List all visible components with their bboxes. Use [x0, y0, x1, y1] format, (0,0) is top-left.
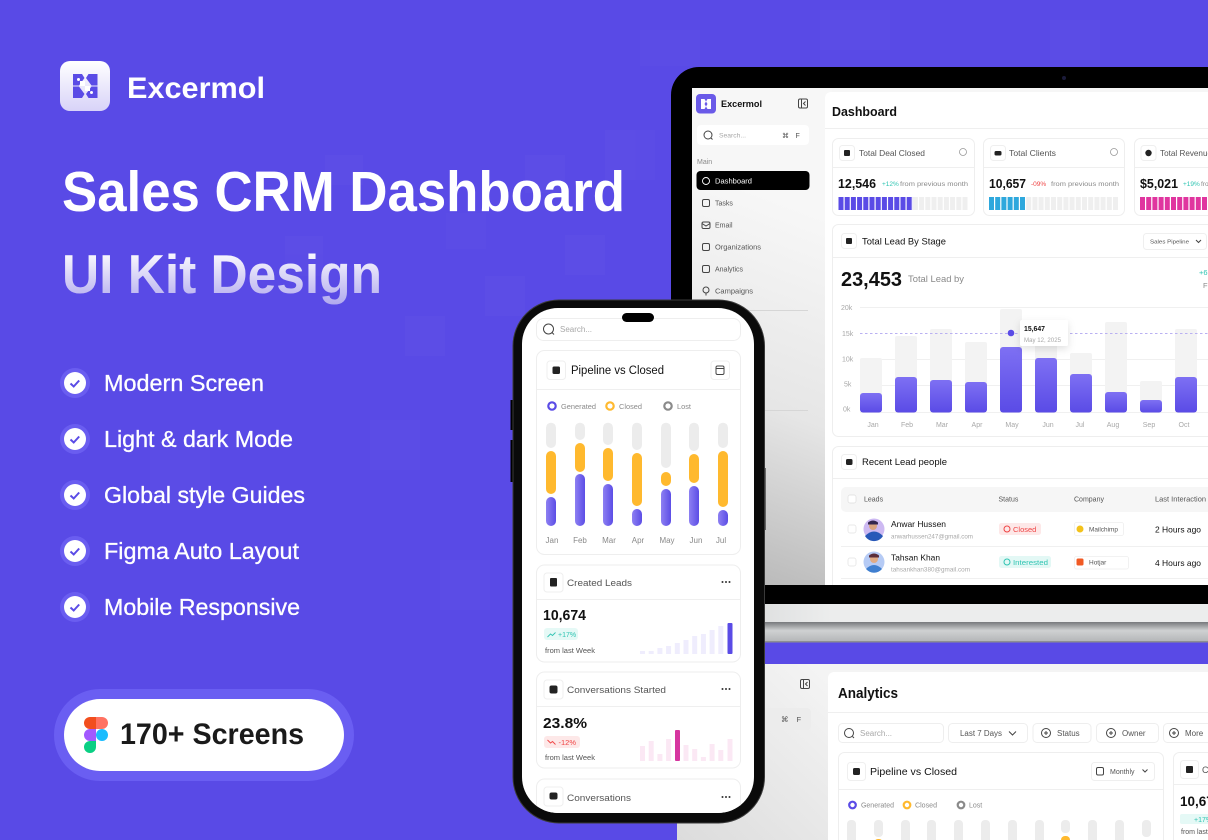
- calendar button: [711, 361, 730, 380]
- filter: more: More: [1185, 729, 1204, 738]
- chart card: total lead by stage: Total Lead By Stage: [862, 236, 946, 248]
- chart card: total lead by stage: F: [1203, 281, 1208, 290]
- bar chart: Apr: [972, 422, 983, 429]
- laptop bezel: [671, 67, 1208, 604]
- mini bar chart: [640, 730, 732, 761]
- bar chart: Oct: [1179, 422, 1189, 429]
- legend: Generated: [561, 402, 596, 411]
- bar chart: 10k: [842, 356, 854, 364]
- phone card: created leads: 10,674: [543, 607, 587, 624]
- stat card: total revenue: $5,021: [1140, 176, 1178, 191]
- nav: tasks: [702, 200, 733, 208]
- filter: last 7 days: Last 7 Days: [960, 729, 1002, 738]
- nav: analytics: Analytics: [715, 266, 744, 274]
- phone card: pipeline vs closed: [536, 350, 740, 554]
- table row: anwar hussen: Anwar Hussen: [891, 519, 946, 529]
- feature: light and dark mode: [60, 424, 293, 454]
- table row: anwar hussen: Mailchimp: [1089, 526, 1118, 534]
- stacked bar chart: Apr: [632, 536, 645, 545]
- stat card: total clients: Total Clients: [1009, 148, 1056, 158]
- nav: campaigns: [703, 287, 754, 296]
- badge label: 170+ Screens: [120, 718, 304, 751]
- chart card: total lead by stage: Total Lead by: [908, 274, 964, 285]
- stat card: total deal closed: Total Deal Closed: [859, 148, 925, 158]
- nav: email: Email: [715, 222, 733, 230]
- logo wordmark: Excermol: [127, 72, 265, 105]
- laptop screen: [692, 88, 1208, 585]
- phone card: conversations started: [536, 672, 740, 768]
- phone card: created leads: [536, 565, 740, 662]
- analytics sidebar search: [700, 708, 811, 730]
- analytics sidebar search: ⌘: [781, 715, 789, 724]
- table row: tahsan khan: Tahsan Khan: [891, 552, 940, 562]
- analytics screen mockup: [677, 664, 1208, 840]
- stat card: total clients: 10,657: [989, 176, 1026, 191]
- stacked bar chart: Jun: [690, 536, 702, 545]
- legend: [548, 402, 692, 411]
- analytics created leads card: from last: [1181, 829, 1208, 836]
- table row: tahsan khan: [848, 552, 1201, 574]
- trend pill: [544, 736, 580, 748]
- bar chart: May: [1005, 422, 1019, 429]
- feature: modern screen: [60, 368, 264, 398]
- sidebar search: [704, 130, 800, 140]
- feature: mobile responsive: Mobile Responsive: [104, 594, 300, 620]
- stacked bar chart: Jan: [546, 536, 558, 545]
- feature list: [60, 368, 305, 622]
- table row: anwar hussen: [848, 518, 1201, 541]
- sidebar search: ⌘: [782, 132, 789, 140]
- phone search: Search...: [560, 325, 592, 334]
- trend pill: +17%: [558, 632, 576, 639]
- phone screen: [522, 308, 754, 839]
- phone card: conversations: [536, 778, 741, 813]
- stacked bars preview: [847, 820, 1151, 840]
- bar chart: 20k: [841, 305, 853, 312]
- more menu: [722, 688, 730, 690]
- sidebar logo: [696, 94, 762, 114]
- phone side buttons: [510, 400, 766, 530]
- monthly dropdown: [1092, 762, 1154, 780]
- analytics collapse icon: [800, 680, 810, 688]
- table header: [841, 487, 1208, 512]
- background texture squares: [150, 10, 1100, 610]
- stat card: total deal closed: +12%: [882, 181, 899, 188]
- bar chart: Jun: [1042, 422, 1054, 429]
- stat card: total deal closed: from previous month: [900, 181, 968, 188]
- sidebar section label: Main: [697, 159, 712, 166]
- nav: dashboard active: Dashboard: [715, 178, 752, 186]
- table header: Status: [998, 496, 1019, 504]
- nav: dashboard active: [696, 171, 810, 190]
- filter: status: [1033, 724, 1091, 742]
- stat card: total deal closed: [832, 138, 974, 216]
- bar chart: 15k: [842, 331, 854, 338]
- sidebar search: Search...: [719, 132, 746, 140]
- stacked bar chart: Feb: [573, 536, 587, 545]
- filter: owner: Owner: [1122, 729, 1146, 738]
- laptop camera: [1062, 76, 1066, 80]
- main panel: [825, 92, 1208, 596]
- filter: last 7 days: [948, 724, 1028, 742]
- stat card: total clients: from previous month: [1051, 181, 1119, 188]
- filter: owner: [1096, 724, 1158, 742]
- dropdown: sales pipeline: Sales Pipeline: [1150, 240, 1189, 246]
- trend pill: [544, 628, 578, 640]
- trend pill: -12%: [558, 738, 576, 747]
- phone notch: [622, 313, 654, 322]
- analytics sidebar search: F: [796, 715, 802, 724]
- more menu: [722, 581, 730, 583]
- table row: tahsan khan: 4 Hours ago: [1155, 558, 1201, 568]
- table row: anwar hussen: 2 Hours ago: [1155, 524, 1201, 534]
- stat card: total clients: [984, 138, 1124, 216]
- table header: Leads: [864, 496, 884, 504]
- tooltip: [1020, 320, 1068, 346]
- nav: organizations: Organizations: [715, 244, 762, 252]
- analytics main panel: [828, 672, 1208, 840]
- feature: modern screen: Modern Screen: [104, 370, 264, 396]
- legend: Generated: [861, 802, 894, 810]
- table header: Company: [1074, 496, 1104, 504]
- chart card: total lead by stage: [832, 224, 1208, 436]
- title line two: UI Kit Design: [62, 243, 382, 305]
- table card: recent lead people: [832, 446, 1208, 596]
- screens badge: [54, 689, 354, 781]
- table card: recent lead people: Recent Lead people: [862, 457, 947, 468]
- page heading: Dashboard: [832, 104, 897, 119]
- phone card: created leads: Created Leads: [567, 578, 633, 588]
- legend: Lost: [969, 802, 982, 810]
- bar chart: 5k: [844, 382, 852, 388]
- icon: figma: [84, 717, 108, 753]
- stat card: total clients: -09%: [1031, 181, 1046, 188]
- monthly dropdown: Monthly: [1110, 769, 1135, 776]
- bar chart: Feb: [901, 422, 913, 429]
- logo: [60, 61, 265, 111]
- nav: campaigns: Campaigns: [715, 288, 754, 296]
- collapse icon: [798, 99, 808, 108]
- legend: Closed: [915, 802, 937, 810]
- laptop mockup: [671, 67, 1208, 642]
- phone card: created leads: from last Week: [545, 648, 596, 655]
- sidebar search: F: [796, 133, 800, 140]
- dropdown: sales pipeline: [1144, 234, 1206, 250]
- more menu: [722, 796, 730, 798]
- tooltip: 15,647: [1024, 326, 1045, 333]
- table row: anwar hussen: anwarhussen247@gmail.com: [891, 534, 973, 540]
- legend: Lost: [677, 402, 692, 411]
- table row: anwar hussen: Closed: [1013, 525, 1036, 534]
- mini bar chart: [640, 623, 732, 654]
- bar chart: Jan: [867, 422, 879, 429]
- stat card: total revenue: [1134, 138, 1208, 216]
- title: [62, 160, 625, 305]
- analytics heading: Analytics: [838, 686, 898, 702]
- bar chart: [841, 305, 1208, 429]
- phone card: conversations started: Conversations Started: [567, 685, 666, 695]
- analytics created leads card: [1174, 752, 1208, 840]
- tooltip: May 12, 2025: [1024, 337, 1061, 344]
- title line one: Sales CRM Dashboard: [62, 160, 625, 224]
- table row: tahsan khan: Interested: [1013, 558, 1048, 567]
- phone search: [536, 318, 740, 340]
- feature: global style guides: Global style Guides: [104, 482, 305, 508]
- laptop bottom bezel: [671, 585, 1208, 604]
- filter: status: Status: [1057, 729, 1080, 738]
- analytics pipeline card: [838, 752, 1164, 840]
- sidebar logo: Excermol: [721, 99, 762, 110]
- logo icon: [60, 61, 110, 111]
- feature: figma auto layout: Figma Auto Layout: [104, 538, 300, 564]
- stacked bar chart: Jul: [716, 536, 726, 545]
- table row: tahsan khan: tahsankhan380@gmail.com: [891, 568, 970, 574]
- bar chart: 0k: [843, 406, 851, 414]
- phone card: pipeline vs closed: Pipeline vs Closed: [571, 365, 664, 377]
- filter: more: [1164, 724, 1208, 742]
- analytics pipeline card: Pipeline vs Closed: [870, 766, 957, 778]
- phone card: conversations started: 23.8%: [543, 715, 587, 732]
- legend: [849, 802, 982, 810]
- stat card: total revenue: +19%: [1183, 181, 1200, 188]
- lead total: 23,453: [841, 269, 902, 291]
- legend: Closed: [619, 402, 642, 411]
- stacked bar chart: May: [659, 536, 675, 545]
- table header: Last Interaction: [1155, 496, 1206, 504]
- filter: search: [838, 724, 944, 742]
- bar chart: Sep: [1143, 422, 1155, 429]
- nav: email: [702, 222, 733, 230]
- stat card: total deal closed: 12,546: [838, 176, 876, 191]
- chart card: total lead by stage: +6: [1199, 268, 1208, 277]
- bar chart: Jul: [1076, 422, 1085, 429]
- phone body: [513, 300, 764, 823]
- phone mockup: [510, 300, 766, 839]
- bar chart: Aug: [1107, 422, 1119, 429]
- table row: tahsan khan: Hotjar: [1089, 560, 1107, 566]
- laptop base: [671, 600, 1208, 642]
- nav: organizations: [702, 244, 762, 252]
- nav: analytics: [702, 266, 744, 274]
- feature: light and dark mode: Light & dark Mode: [104, 426, 293, 452]
- sidebar: [692, 88, 832, 585]
- bar chart: Mar: [936, 422, 949, 429]
- phone card: conversations started: from last Week: [545, 755, 596, 762]
- feature: figma auto layout: [60, 536, 300, 566]
- stacked bar chart: Mar: [602, 536, 616, 545]
- filter: search: Search...: [860, 729, 892, 738]
- nav: tasks: Tasks: [715, 200, 733, 208]
- phone card: conversations: Conversations: [567, 793, 632, 803]
- stacked bar chart: [546, 423, 728, 545]
